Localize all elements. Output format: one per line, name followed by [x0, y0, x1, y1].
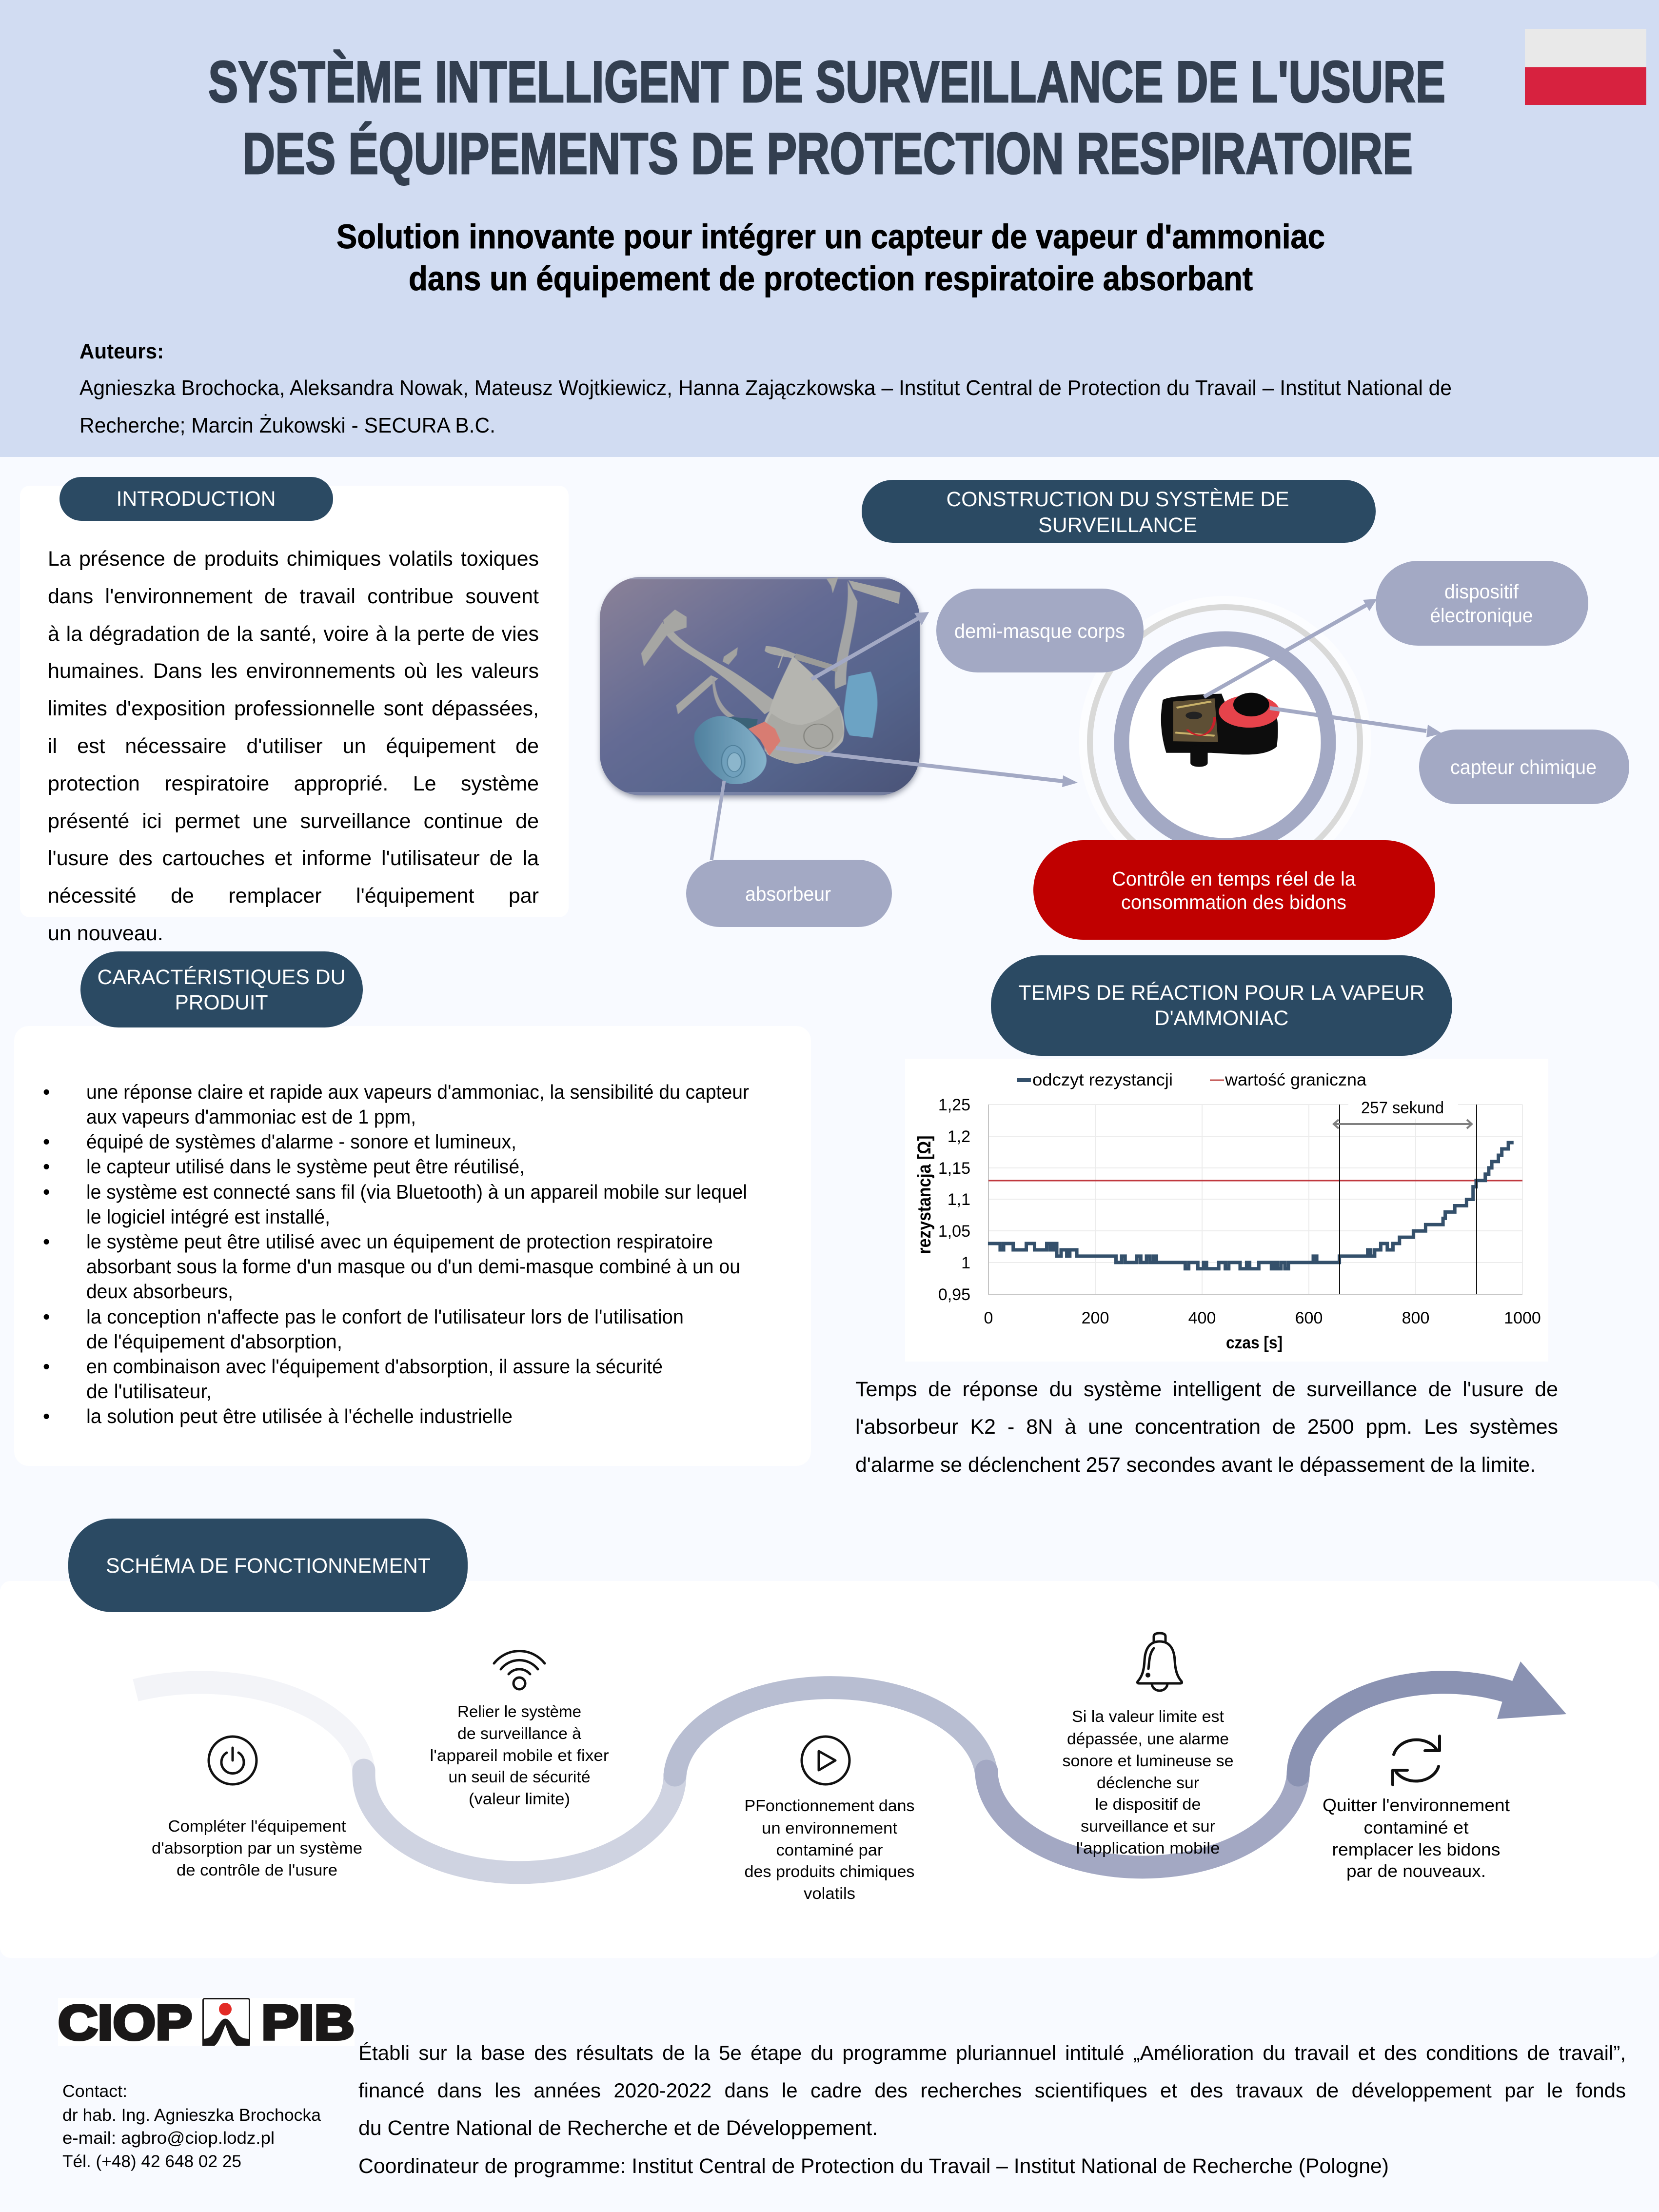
icon: polish flag [1525, 29, 1646, 105]
chart legend: wartość graniczna [1224, 1070, 1367, 1089]
arrow: electronic device [1204, 599, 1377, 697]
bullet list: le système peut être utilisé avec un équipement de protection respiratoire [86, 1230, 713, 1253]
bullet list: équipé de systèmes d'alarme - sonore et lumineux, [86, 1130, 516, 1153]
funding text: du Centre National de Recherche et de Développement. [358, 2116, 878, 2140]
step 5 text: contaminé et [1363, 1817, 1469, 1837]
contact block [62, 2082, 321, 2171]
y axis labels: 1,25 [938, 1096, 970, 1114]
step 3 text: PFonctionnement dans [744, 1797, 915, 1815]
text block: introduction: il est nécessaire d'utiliser un équipement de [48, 734, 539, 758]
contact block: dr hab. Ing. Agnieszka Brochocka [62, 2106, 321, 2125]
panel: caractéristiques du produit [14, 951, 811, 1466]
panel: construction du système [600, 480, 1629, 940]
dark filter mesh [728, 717, 758, 731]
pink ring [749, 722, 781, 756]
y axis labels: 1 [961, 1254, 970, 1272]
annotation: 257 sekund: 257 sekund [1361, 1099, 1444, 1117]
text block: introduction: La présence de produits chimiques volatils toxiques [48, 547, 539, 571]
heading: introduction [59, 477, 333, 521]
logo: CIOP PIB: PIB [261, 1995, 355, 2050]
heading: introduction: INTRODUCTION [116, 487, 276, 511]
face frame [764, 705, 844, 764]
step 4 text: surveillance et sur [1081, 1817, 1215, 1835]
funding text [358, 2034, 1626, 2178]
bullet list: de l'équipement d'absorption, [86, 1330, 342, 1353]
x axis labels: 0 [984, 1309, 993, 1327]
callout: capteur chimique: capteur chimique [1450, 756, 1597, 778]
bullet list: • [43, 1405, 50, 1427]
step 4 text [1062, 1707, 1234, 1857]
text block: introduction: protection respiratoire approprié. Le système [48, 772, 539, 795]
callout: demi-masque corps: demi-masque corps [954, 620, 1125, 642]
image: electronic device [1161, 693, 1280, 767]
heading: caractéristiques: PRODUIT [175, 991, 268, 1014]
limit line [988, 1180, 1522, 1181]
bullet list: aux vapeurs d'ammoniac est de 1 ppm, [86, 1106, 416, 1128]
callout: contrôle en temps réel: consommation des bidons [1121, 891, 1346, 913]
step 1 text: de contrôle de l'usure [177, 1861, 337, 1879]
strap: left lower [676, 675, 718, 714]
text block: introduction: présenté ici permet une surveillance continue de [48, 810, 539, 833]
bullet list: • [43, 1130, 50, 1153]
text block: introduction: humaines. Dans les environnements où les valeurs [48, 659, 539, 683]
x axis labels: 800 [1402, 1309, 1429, 1327]
arrow: half mask body [811, 612, 929, 679]
contact block: Contact: [62, 2082, 127, 2101]
chart legend: odczyt rezystancji [1032, 1070, 1173, 1089]
step 3 [744, 1737, 915, 1902]
icon: refresh [1393, 1736, 1440, 1785]
arrow: absorber line [711, 781, 724, 860]
logo: CIOP PIB: CIOP [58, 1995, 192, 2050]
step 1 text [152, 1817, 362, 1879]
contact block: Tél. (+48) 42 648 02 25 [62, 2152, 241, 2171]
step 3 text: contaminé par [776, 1841, 883, 1859]
process wave [136, 1682, 1507, 1873]
text block: introduction: limites d'exposition professionnelle sont dépassées, [48, 697, 539, 720]
step 1 [152, 1737, 362, 1879]
step 4 text: sonore et lumineuse se [1062, 1752, 1234, 1770]
strap: pin [794, 653, 838, 672]
step 4 text: Si la valeur limite est [1072, 1707, 1224, 1725]
x axis labels: 400 [1188, 1309, 1216, 1327]
authors: Recherche; Marcin Żukowski - SECURA B.C. [79, 414, 495, 437]
bullet list: une réponse claire et rapide aux vapeurs d'ammoniac, la sensibilité du capteur [86, 1081, 749, 1103]
icon: play [802, 1737, 849, 1784]
data series [988, 1143, 1514, 1269]
callout: absorbeur [686, 860, 892, 927]
bullet list: la solution peut être utilisée à l'échelle industrielle [86, 1405, 513, 1427]
bullet list: en combinaison avec l'équipement d'absorption, il assure la sécurité [86, 1355, 663, 1378]
step 1 text: d'absorption par un système [152, 1839, 362, 1857]
heading: construction: SURVEILLANCE [1038, 514, 1197, 537]
heading: construction: CONSTRUCTION DU SYSTÈME DE [946, 488, 1289, 511]
funding text: Coordinateur de programme: Institut Central de Protection du Travail – Institut National de Recherche (Pologne) [358, 2154, 1389, 2178]
y axis title: rezystancja [Ω] [914, 1135, 935, 1254]
chart legend [1017, 1070, 1367, 1089]
text block: introduction: un nouveau. [48, 922, 163, 945]
heading: construction [862, 480, 1376, 543]
bullet list: la conception n'affecte pas le confort de l'utilisateur lors de l'utilisation [86, 1305, 684, 1328]
subtitle [336, 217, 1325, 297]
valve [804, 724, 833, 749]
funding text: financé dans les années 2020-2022 dans le cadre des recherches scientifiques et des travaux de développement par le fonds [358, 2079, 1626, 2102]
title [208, 49, 1445, 186]
authors [79, 339, 1452, 437]
text block: chart description: d'alarme se déclenchent 257 secondes avant le dépassement de la limite. [855, 1453, 1536, 1477]
icon: power [209, 1737, 257, 1784]
arrow: cartridge to device [776, 748, 1078, 787]
y axis labels: 0,95 [938, 1285, 970, 1304]
bullet list: le système est connecté sans fil (via Bluetooth) à un appareil mobile sur lequel [86, 1181, 747, 1203]
icon: wifi [494, 1651, 545, 1689]
subtitle: Solution innovante pour intégrer un capteur de vapeur d'ammoniac [336, 217, 1325, 256]
bullet list [43, 1081, 749, 1427]
strap: right upper [849, 580, 900, 604]
callout: absorbeur: absorbeur [745, 883, 831, 905]
header panel [0, 0, 1659, 457]
bullet list: • [43, 1155, 50, 1178]
step 5 text: Quitter l'environnement [1323, 1795, 1510, 1815]
right cartridge [844, 672, 877, 738]
step 4 text: l'application mobile [1076, 1839, 1220, 1857]
marker lines [1340, 1105, 1477, 1294]
funding text: Établi sur la base des résultats de la 5e étape du programme pluriannuel intitulé „Amélioration du travail et des conditions de travail”, [358, 2041, 1626, 2064]
x axis labels: 200 [1082, 1309, 1109, 1327]
contact block: e-mail: agbro@ciop.lodz.pl [62, 2129, 275, 2148]
circle rings around electronic device [1079, 596, 1371, 889]
text block: introduction: à la dégradation de la santé, voire à la perte de vies [48, 622, 539, 646]
panel: temps de réaction [855, 955, 1558, 1477]
step 5 text [1323, 1795, 1510, 1881]
subtitle: dans un équipement de protection respiratoire absorbant [409, 259, 1253, 297]
arrow head [1497, 1661, 1566, 1719]
authors: Auteurs: [79, 339, 164, 363]
left cartridge [694, 716, 767, 784]
step 3 text: volatils [804, 1884, 855, 1902]
heading: temps de réaction: D'AMMONIAC [1155, 1007, 1288, 1030]
step 2 [430, 1651, 609, 1808]
bullet list: de l'utilisateur, [86, 1380, 212, 1402]
step 2 text: de surveillance à [457, 1724, 582, 1742]
bullet list: deux absorbeurs, [86, 1280, 233, 1303]
callout: contrôle en temps réel [1033, 840, 1435, 940]
step 5 text: remplacer les bidons [1332, 1839, 1500, 1859]
step 4 text: déclenche sur [1097, 1774, 1199, 1792]
heading: caractéristiques: CARACTÉRISTIQUES DU [98, 966, 345, 989]
authors: Agnieszka Brochocka, Aleksandra Nowak, Mateusz Wojtkiewicz, Hanna Zajączkowska – Institut Central de Protection du Travail – Institut National de [79, 376, 1452, 400]
step 5 [1323, 1736, 1510, 1881]
step 5 text: par de nouveaux. [1346, 1861, 1486, 1881]
x axis labels: 1000 [1504, 1309, 1541, 1327]
callout: contrôle en temps réel: Contrôle en temps réel de la [1112, 868, 1356, 890]
y axis labels: 1,2 [948, 1127, 970, 1146]
text block: chart description [855, 1371, 1558, 1477]
step 2 text [430, 1702, 609, 1808]
text block: introduction: nécessité de remplacer l'équipement par [48, 884, 539, 908]
text block: introduction: l'usure des cartouches et informe l'utilisateur de la [48, 847, 539, 870]
logo: CIOP PIB [58, 1995, 355, 2050]
bullet list: • [43, 1355, 50, 1378]
step 3 text [744, 1797, 915, 1902]
face piece [763, 656, 844, 764]
x axis labels [984, 1309, 1541, 1327]
step 3 text: un environnement [762, 1819, 897, 1837]
step 4 text: dépassée, une alarme [1067, 1730, 1229, 1748]
y axis labels: 1,1 [948, 1190, 970, 1209]
x axis labels: 600 [1295, 1309, 1323, 1327]
y axis labels [938, 1096, 970, 1304]
step 2 text: un seuil de sécurité [449, 1768, 590, 1786]
heading: schéma de fonctionnement: SCHÉMA DE FONCTIONNEMENT [106, 1554, 431, 1578]
text block: introduction [48, 540, 539, 960]
text block: chart description: l'absorbeur K2 - 8N à une concentration de 2500 ppm. Les systèmes [855, 1415, 1558, 1439]
x axis title: czas [s] [1226, 1333, 1283, 1352]
bullet list: absorbant sous la forme d'un masque ou d'un demi-masque combiné à un ou [86, 1255, 740, 1278]
strap: left upper [661, 623, 780, 714]
bullet list: le logiciel intégré est installé, [86, 1205, 330, 1228]
bullet list: • [43, 1081, 50, 1103]
line chart: résistance [905, 1059, 1548, 1362]
bullet list: • [43, 1181, 50, 1203]
heading: caractéristiques [80, 951, 363, 1027]
heading: temps de réaction: TEMPS DE RÉACTION POUR LA VAPEUR [1018, 981, 1425, 1005]
callout: demi-masque corps [936, 589, 1144, 672]
panel: introduction [20, 477, 569, 960]
arrow: chemical sensor [1270, 708, 1442, 737]
bullet list: le capteur utilisé dans le système peut être réutilisé, [86, 1155, 525, 1178]
callout: dispositif électronique [1376, 561, 1588, 646]
callout: capteur chimique [1419, 730, 1629, 804]
step 2 text: Relier le système [457, 1702, 581, 1720]
panel: schéma de fonctionnement [0, 1519, 1659, 1958]
callout: dispositif électronique: électronique [1430, 604, 1533, 627]
panel: footer [58, 1995, 1626, 2178]
y axis labels: 1,05 [938, 1222, 970, 1241]
step 1 text: Compléter l'équipement [168, 1817, 346, 1835]
step 2 text: (valeur limite) [469, 1790, 570, 1808]
annotation: 257 sekund [1334, 1097, 1472, 1128]
step 3 text: des produits chimiques [744, 1862, 915, 1880]
heading: schéma de fonctionnement [68, 1519, 468, 1612]
step 4 [1062, 1633, 1234, 1857]
bullet list: • [43, 1305, 50, 1328]
bullet list: • [43, 1230, 50, 1253]
heading: temps de réaction [991, 955, 1452, 1056]
callout: dispositif électronique: dispositif [1444, 580, 1519, 603]
image: half mask with cartridges [600, 577, 920, 798]
step 4 text: le dispositif de [1095, 1795, 1201, 1813]
text block: introduction: dans l'environnement de travail contribue souvent [48, 585, 539, 608]
y axis labels: 1,15 [938, 1159, 970, 1178]
step 2 text: l'appareil mobile et fixer [430, 1746, 609, 1764]
text block: chart description: Temps de réponse du système intelligent de surveillance de l'usure de [855, 1378, 1558, 1401]
icon: bell [1137, 1633, 1182, 1691]
